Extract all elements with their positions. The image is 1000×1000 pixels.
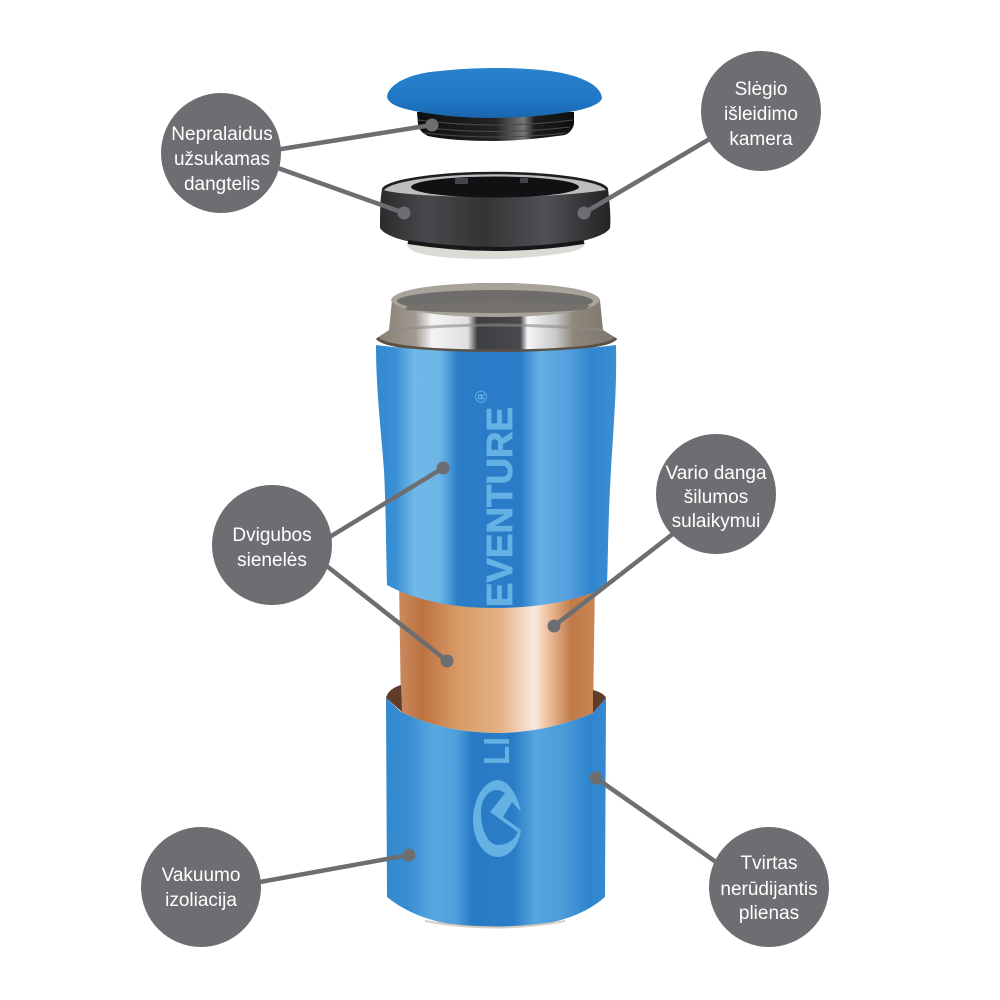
base edge [425, 921, 565, 928]
callout: copper coating: Vario danga [665, 463, 767, 484]
callout: pressure chamber: kamera [729, 129, 793, 150]
callout: vacuum insulation: izoliacija [165, 890, 237, 911]
lid: blue cap [387, 68, 602, 118]
callout: stainless steel: Tvirtas [740, 853, 798, 874]
brand text EVENTURE: EVENTURE [479, 407, 520, 607]
callout: double walls [212, 485, 332, 605]
leader: ring left [275, 167, 410, 220]
callout: vacuum insulation: Vakuumo [162, 865, 240, 886]
leader: copper [548, 533, 674, 632]
sealing ring [380, 172, 610, 259]
brand logo [473, 780, 521, 857]
copper layer [399, 580, 595, 733]
mug: steel rim [377, 283, 616, 352]
leader: lid [275, 118, 438, 150]
leader: ring right [578, 140, 708, 220]
callout: copper coating: šilumos [684, 487, 748, 508]
callout: vacuum insulation [141, 827, 261, 947]
lower blue sleeve [386, 698, 606, 928]
registered mark: ® [472, 390, 491, 403]
upper blue sleeve [376, 345, 616, 608]
callout: double walls: sienelės [237, 550, 307, 571]
leader: double walls copper [328, 567, 454, 668]
callout: stainless steel: nerūdijantis [720, 879, 818, 900]
ring gasket [407, 242, 585, 259]
leader: steel [590, 772, 716, 862]
callout: leakproof lid: dangtelis [184, 174, 260, 195]
callout: leakproof lid: užsukamas [174, 149, 270, 170]
lower sleeve inner shadow [386, 685, 606, 713]
leader: double walls upper [328, 462, 450, 538]
callout: copper coating [656, 434, 776, 554]
callout: pressure chamber: išleidimo [724, 104, 798, 125]
leader lines [260, 118, 716, 882]
ring opening [411, 176, 579, 198]
callout: copper coating: sulaikymui [672, 511, 760, 532]
callout: pressure chamber [701, 51, 821, 171]
callout: leakproof lid [161, 93, 281, 213]
brand text LI: LI [476, 737, 517, 765]
callout: stainless steel: plienas [739, 903, 799, 924]
callout: pressure chamber: Slėgio [735, 79, 787, 100]
lid: threaded plug [417, 112, 574, 141]
ring body [380, 172, 610, 249]
callout: stainless steel [709, 827, 829, 947]
callout: leakproof lid: Nepralaidus [171, 124, 273, 145]
callout: double walls: Dvigubos [232, 525, 312, 546]
leader: vacuum [260, 848, 416, 882]
